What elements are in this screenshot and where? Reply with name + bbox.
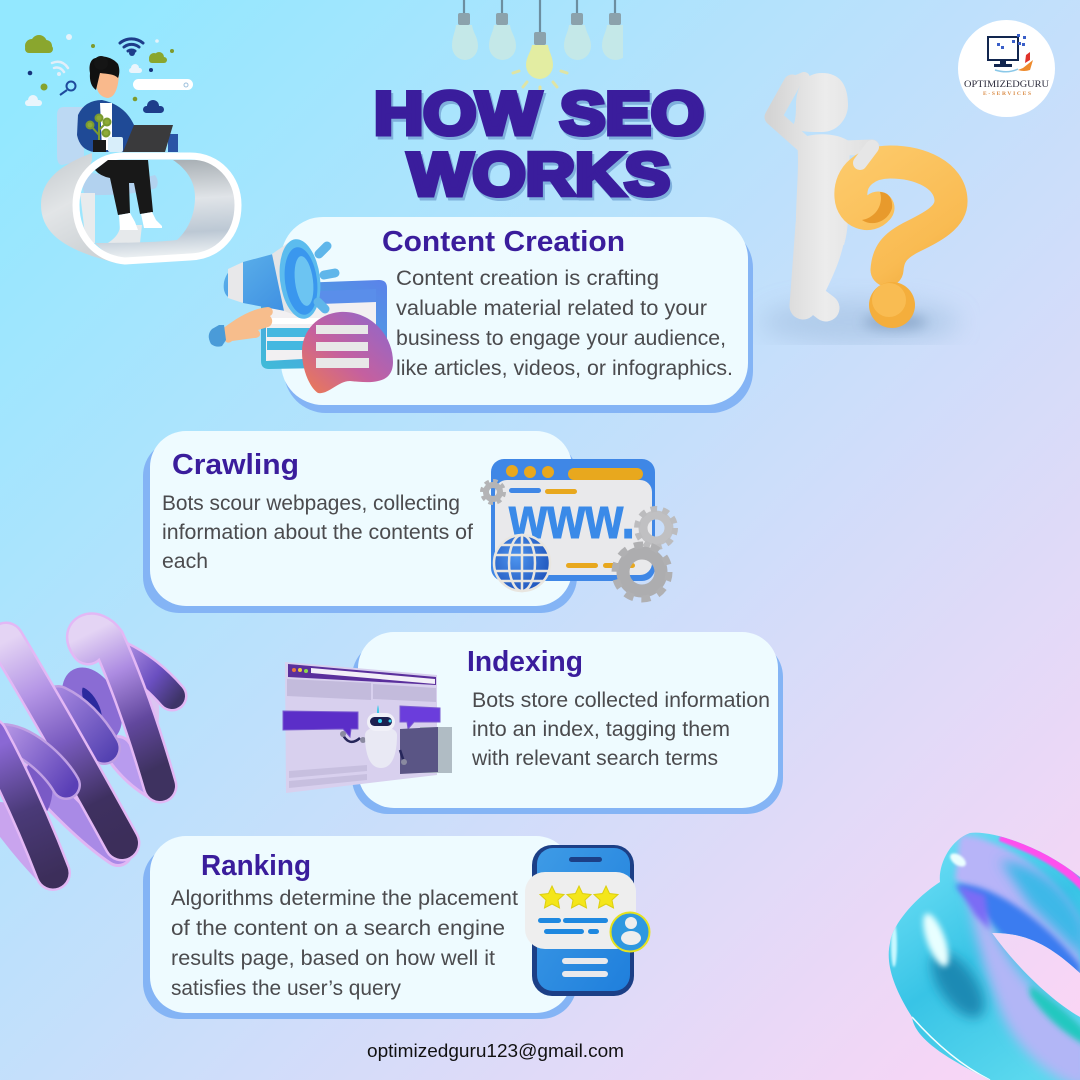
rating card xyxy=(525,872,636,949)
body: ranking: of the content on a search engine xyxy=(171,917,505,940)
document xyxy=(261,280,387,369)
logo name: OPTIMIZEDGURU xyxy=(964,80,1049,90)
body: content creation: valuable material related to your xyxy=(396,297,707,320)
person xyxy=(77,56,178,230)
desk xyxy=(41,153,238,263)
body: content creation: business to engage your audience, xyxy=(396,327,726,350)
body: indexing: into an index, tagging them xyxy=(472,718,730,741)
illustration: person at desk xyxy=(25,34,238,263)
icon: stars xyxy=(540,886,618,908)
body: ranking xyxy=(171,887,518,1000)
logo tagline: E-SERVICES xyxy=(983,91,1031,97)
floor shadow xyxy=(760,300,960,344)
title xyxy=(374,80,706,211)
panel: indexing xyxy=(352,632,783,814)
body: content creation xyxy=(396,267,733,380)
illustration: robot on web page xyxy=(283,662,452,793)
footer email: optimizedguru123@gmail.com xyxy=(367,1041,624,1061)
panel: ranking xyxy=(143,836,577,1019)
body: ranking: results page, based on how well it xyxy=(171,947,495,970)
web page xyxy=(285,662,437,793)
heading: ranking: Ranking xyxy=(201,850,311,882)
title text: WORKS xyxy=(408,141,670,208)
robot xyxy=(340,705,407,768)
hanging light bulbs xyxy=(452,0,629,92)
illustration: www browser window xyxy=(482,459,675,599)
hand on question mark xyxy=(860,147,872,163)
panel: content creation xyxy=(281,217,753,413)
phone xyxy=(532,845,634,996)
decorative purple coil xyxy=(0,630,172,875)
heading: crawling: Crawling xyxy=(172,449,299,481)
body: crawling: Bots scour webpages, collecting xyxy=(162,492,460,515)
icon: floating clouds and wifi xyxy=(25,34,193,113)
heading: indexing: Indexing xyxy=(467,646,583,678)
title text xyxy=(374,80,704,208)
illustration: phone with star rating xyxy=(525,845,650,996)
body: crawling xyxy=(162,492,473,573)
megaphone xyxy=(224,237,335,321)
illustration: megaphone and speech bubble xyxy=(209,237,393,393)
speech bubble xyxy=(302,312,393,393)
body: content creation: Content creation is crafting xyxy=(396,267,659,290)
logo badge xyxy=(958,20,1055,117)
hand xyxy=(209,307,273,347)
panel: crawling xyxy=(143,431,577,613)
body: ranking: Algorithms determine the placement xyxy=(171,887,518,910)
title shadow: WORKS xyxy=(410,144,672,211)
body: ranking: satisfies the user’s query xyxy=(171,977,401,1000)
title shadow xyxy=(376,83,706,211)
icon: globe xyxy=(494,535,550,591)
title text: HOW SEO xyxy=(374,80,704,147)
window dots xyxy=(506,465,643,480)
body: crawling: each xyxy=(162,550,208,573)
figure xyxy=(773,73,872,308)
chair xyxy=(57,107,158,243)
body: crawling: information about the contents of xyxy=(162,521,473,544)
decorative holographic ring xyxy=(880,825,1080,1080)
body: indexing: with relevant search terms xyxy=(471,747,718,770)
data block xyxy=(420,727,452,773)
body: indexing: Bots store collected information xyxy=(472,689,770,712)
body: indexing xyxy=(471,689,770,770)
speech bubbles xyxy=(283,711,358,737)
icon: monitor xyxy=(988,34,1033,72)
body: content creation: like articles, videos, or infographics. xyxy=(396,357,733,380)
icon: user avatar xyxy=(610,912,650,952)
icon: gears xyxy=(482,481,675,599)
question mark xyxy=(851,162,951,328)
title shadow: HOW SEO xyxy=(376,83,706,150)
heading: content creation: Content Creation xyxy=(382,226,625,258)
illustration: thinking figure with question mark xyxy=(760,73,960,344)
www text: www. xyxy=(508,486,635,551)
browser frame xyxy=(491,459,655,581)
